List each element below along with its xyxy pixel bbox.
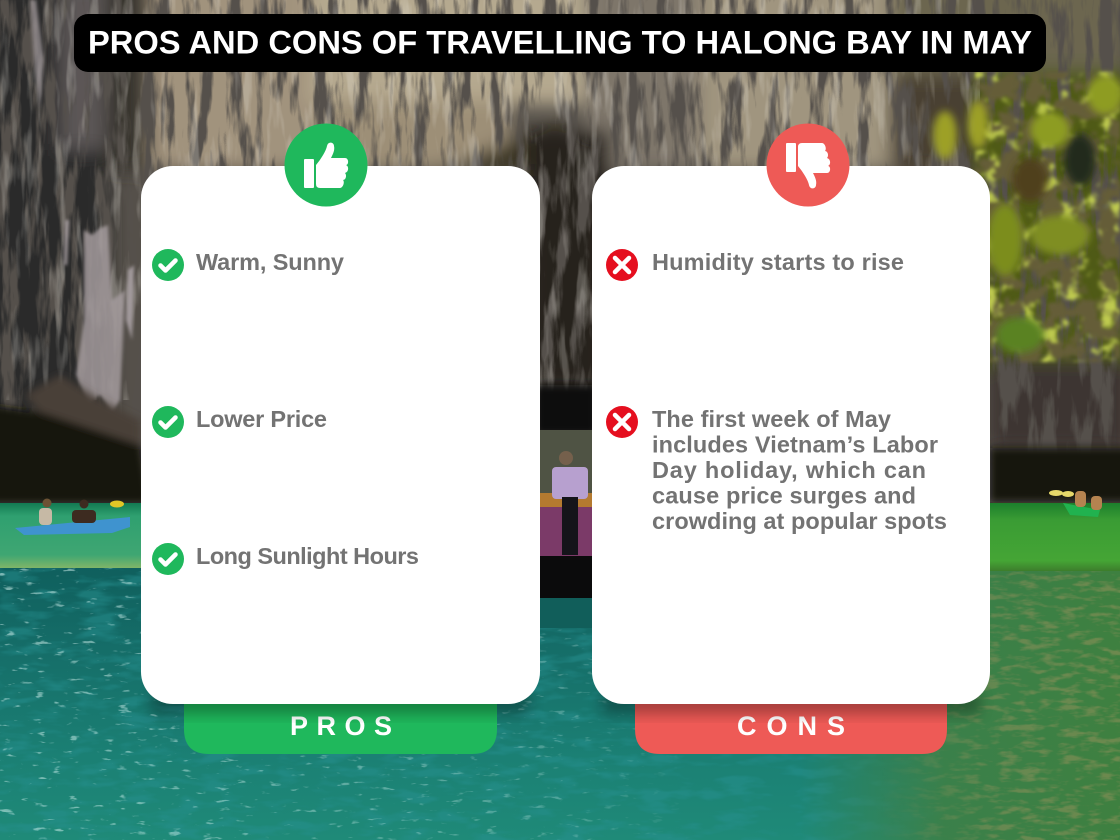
con item: labor day holiday: cause price surges and xyxy=(652,482,916,508)
title banner: PROS AND CONS OF TRAVELLING TO HALONG BAY IN MAY xyxy=(88,24,1032,60)
con item: labor day holiday: includes Vietnam’s Labor xyxy=(652,432,938,458)
icon: thumbs up xyxy=(284,124,368,206)
con item: humidity: Humidity starts to rise xyxy=(652,249,904,275)
title banner xyxy=(74,14,1046,72)
cons label tab xyxy=(635,690,947,754)
water xyxy=(0,566,1120,840)
con item: labor day holiday: Day holiday, which can xyxy=(652,457,926,483)
con item: labor day holiday xyxy=(606,406,947,534)
pros card xyxy=(141,166,540,704)
pro item: lower price: Lower Price xyxy=(196,406,327,432)
centre boat with tourist xyxy=(538,430,594,628)
icon: thumbs down xyxy=(766,124,850,206)
panel: cons xyxy=(592,124,990,754)
dark shoreline xyxy=(0,375,1120,504)
con item: labor day holiday: crowding at popular spots xyxy=(652,508,947,534)
pro item: long sunlight hours: Long Sunlight Hours xyxy=(196,543,419,569)
cliff foliage xyxy=(975,72,1120,362)
pro item: long sunlight hours xyxy=(152,543,419,575)
right kayak xyxy=(1049,490,1102,517)
left kayak xyxy=(15,498,130,535)
pale streaks on left cliff xyxy=(30,0,134,412)
pro item: warm, sunny: Warm, Sunny xyxy=(196,249,344,275)
con item: humidity xyxy=(606,249,904,281)
pros label tab xyxy=(184,690,497,754)
cons card xyxy=(592,166,990,704)
pro item: lower price xyxy=(152,406,327,438)
con item: labor day holiday: The first week of May xyxy=(652,406,891,432)
pros label tab: PROS xyxy=(290,711,392,741)
cons label tab: CONS xyxy=(737,711,845,741)
pro item: warm, sunny xyxy=(152,249,344,281)
panel: pros xyxy=(141,124,540,754)
